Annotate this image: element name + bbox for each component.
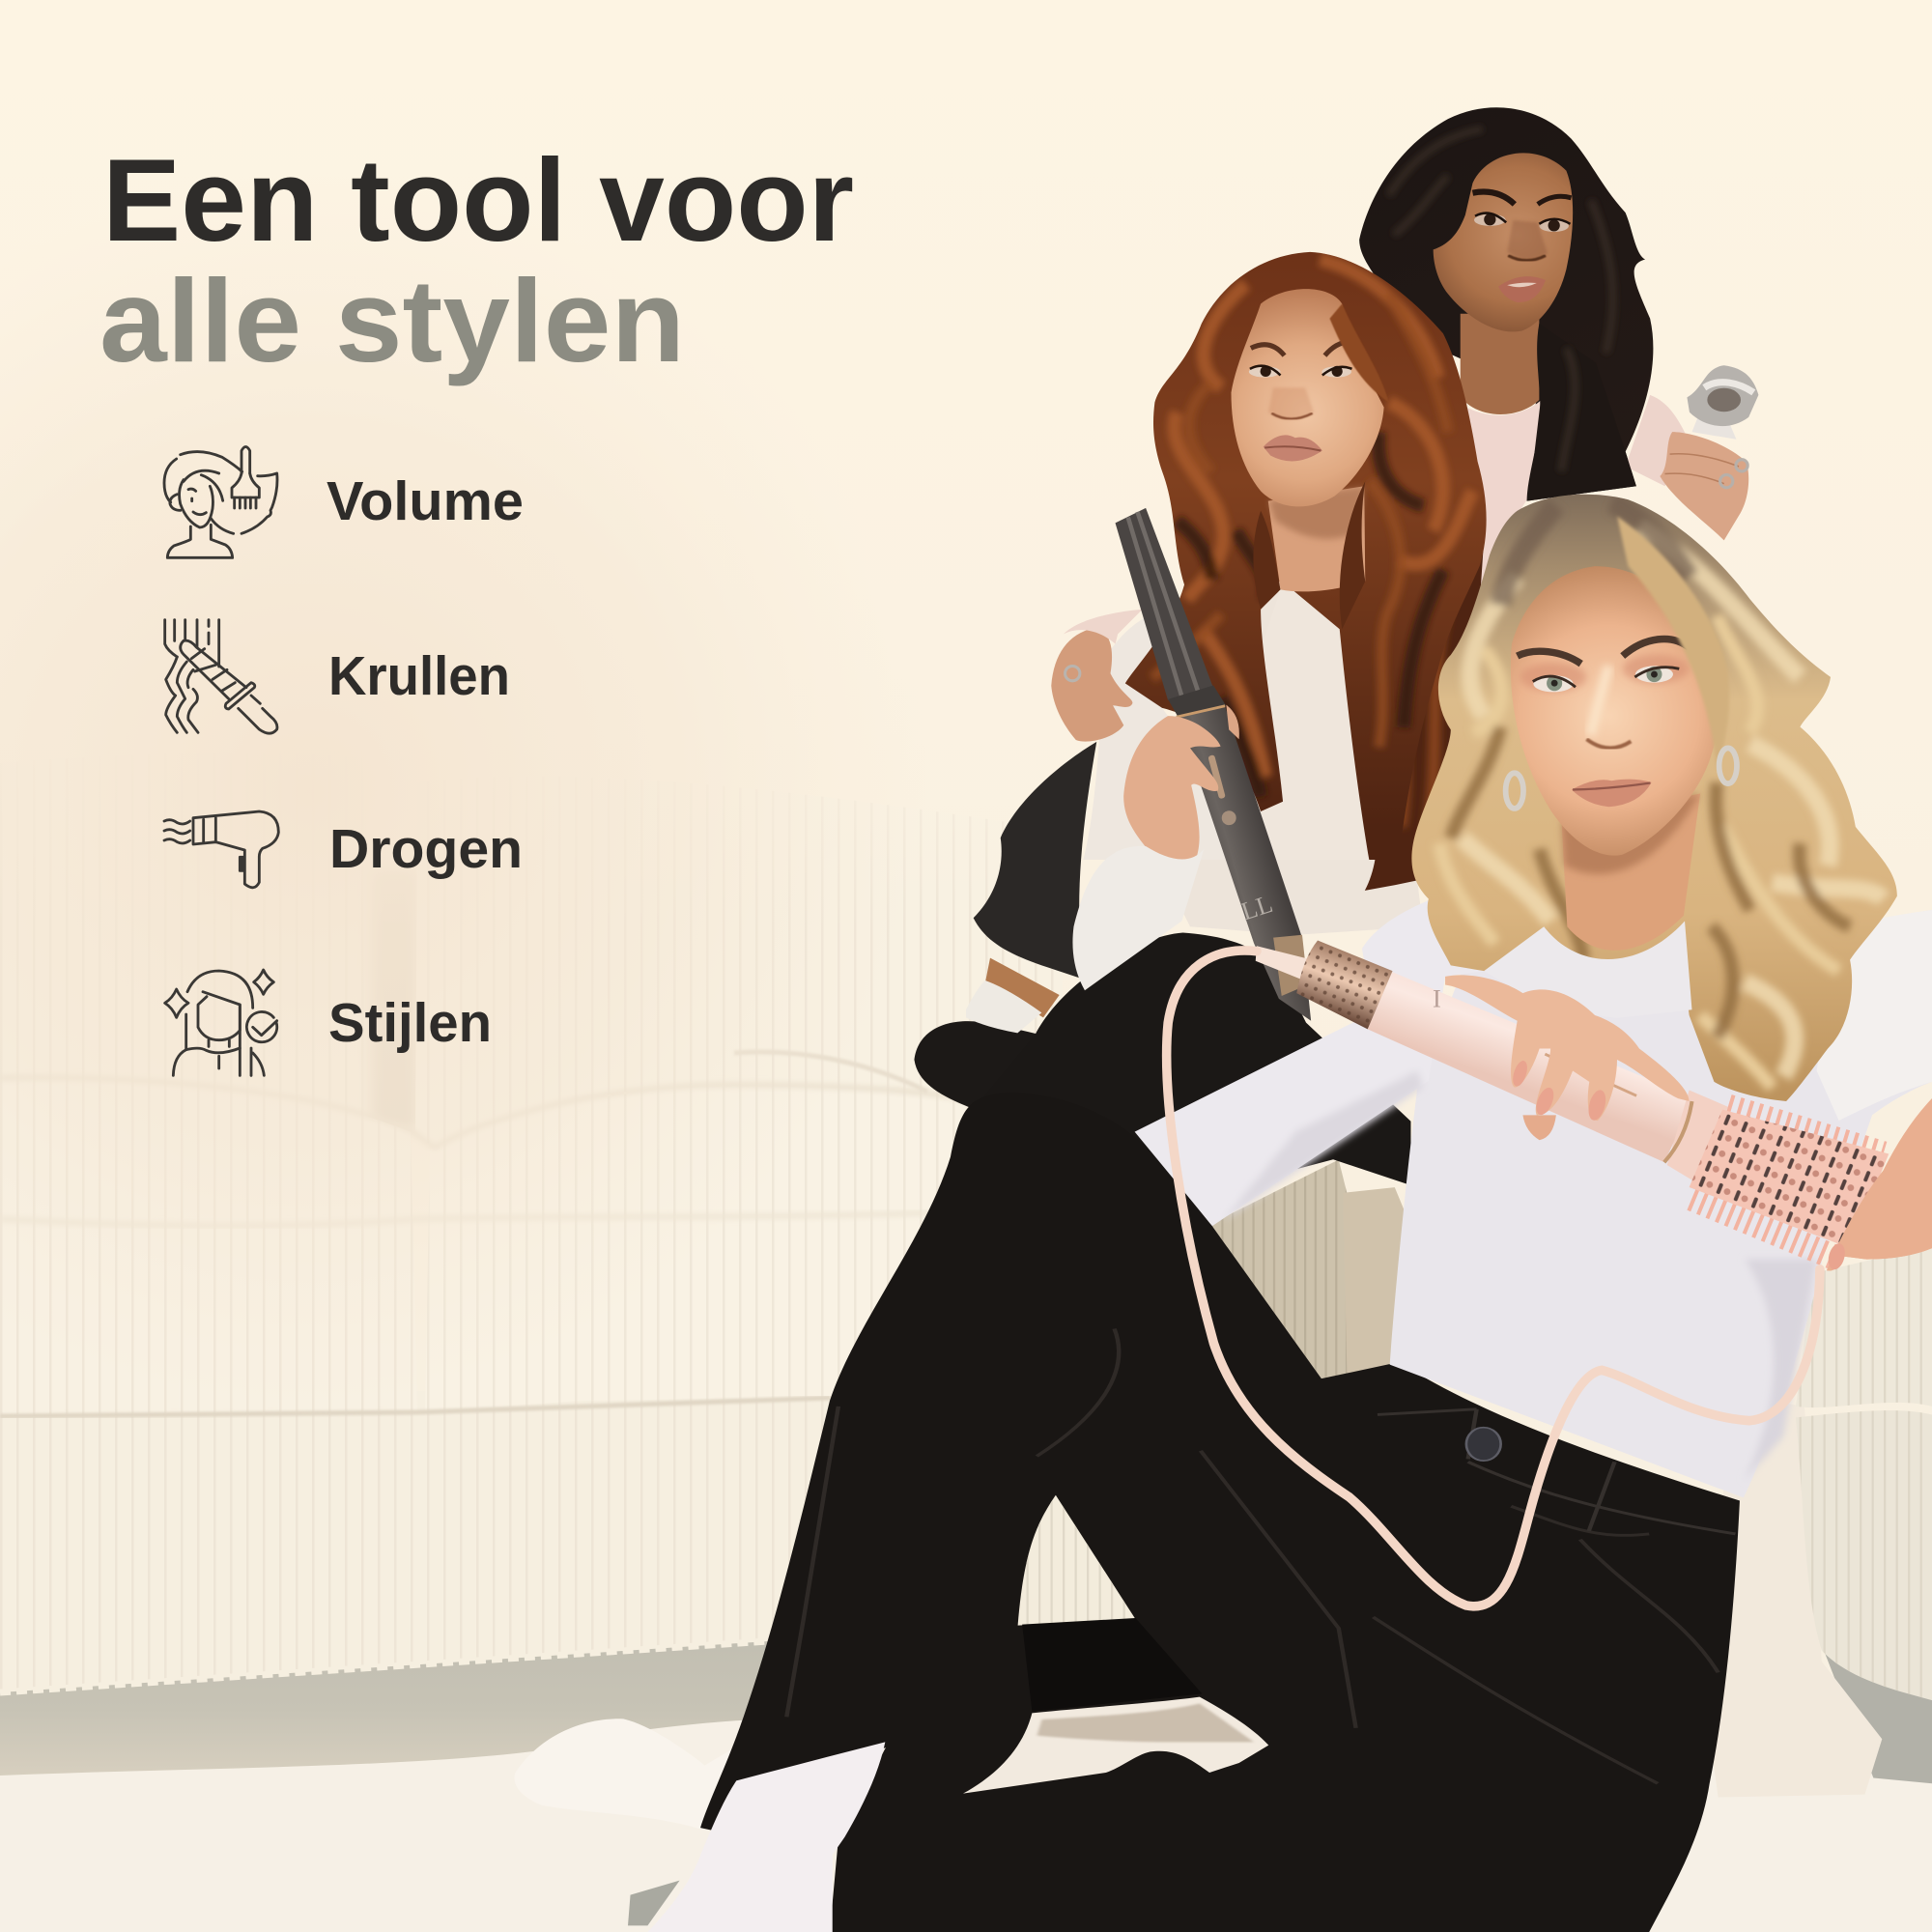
hair strands (1152, 260, 1472, 797)
hair: blonde (1411, 495, 1897, 1101)
feature: Stijlen (165, 970, 492, 1075)
white fluffy throw (1701, 1395, 1882, 1798)
torso shade (1744, 1260, 1817, 1481)
hand on dryer (1445, 975, 1690, 1121)
sofa seen between legs (1018, 1495, 1136, 1626)
sleeve shade (1223, 1070, 1423, 1220)
hair: copper (1125, 252, 1487, 860)
armchair lower (1796, 1410, 1932, 1700)
hand holding attachment (1660, 432, 1748, 540)
lower waves of copper hair (1350, 538, 1484, 891)
copper strand framing face (1330, 303, 1389, 403)
wand collar (1168, 686, 1226, 719)
hair: black (1359, 107, 1653, 501)
hair lower highlights (1389, 550, 1451, 860)
fur rug (0, 1719, 1932, 1932)
armchair upper (1796, 1245, 1932, 1407)
silver attachment (1687, 365, 1758, 440)
neck (1268, 486, 1365, 591)
gap behind armchair (1822, 1645, 1932, 1783)
thumb (1226, 705, 1239, 739)
fingers over brush (1827, 1098, 1932, 1270)
white power cord (1167, 951, 1820, 1606)
rug seen between legs (963, 1697, 1268, 1794)
grey jeans knee (974, 742, 1096, 980)
sofa shadow gap below (0, 1604, 1159, 1797)
title line 2: alle stylen (99, 255, 685, 386)
pink sleeve cuff (1064, 610, 1143, 644)
right hand holding brush (1827, 1098, 1932, 1270)
hand on shoulder (1051, 628, 1132, 742)
icon: hair dryer (164, 811, 278, 888)
label: Volume (327, 470, 524, 531)
white top body (1390, 910, 1932, 1497)
under thumb (1522, 1115, 1556, 1140)
face (1511, 566, 1720, 856)
back cushions (0, 753, 1063, 1150)
facial features (1472, 192, 1572, 302)
ring (1065, 666, 1080, 681)
facial features (1518, 639, 1690, 807)
white top body (1251, 582, 1381, 860)
earrings (1506, 748, 1737, 809)
title line 1: Een tool voor (102, 134, 854, 266)
floor shadow by sock (628, 1881, 680, 1925)
logo mark: I (1433, 983, 1441, 1012)
white top lower torso (1162, 580, 1423, 935)
neck (1461, 314, 1539, 414)
dryer barrel (1296, 941, 1728, 1190)
wand handle (1178, 705, 1311, 1021)
fur shadow (1037, 1703, 1254, 1742)
hair wisps over neck (1253, 481, 1365, 629)
trouser button (1466, 1428, 1501, 1461)
wand styler (1116, 508, 1311, 1021)
face (1434, 153, 1573, 331)
hair strands (1439, 502, 1884, 1088)
panel: red-haired woman (1051, 252, 1487, 935)
black trousers (974, 933, 1410, 1185)
peach tint (0, 164, 966, 1420)
hand holding wand (1123, 716, 1221, 860)
pink neck (1667, 1091, 1728, 1190)
dark floor gap between legs (1022, 1618, 1202, 1712)
feature: Volume (164, 446, 524, 557)
pink top (1458, 400, 1541, 600)
gold ring (1177, 706, 1225, 717)
finger lines and rings (1664, 454, 1747, 488)
label: Drogen (329, 818, 523, 879)
panel: lower leg details (628, 1618, 1268, 1932)
panel: blonde woman trousers (700, 1093, 1740, 1932)
panel: red-haired woman lower body (914, 742, 1410, 1185)
neck (1562, 793, 1700, 951)
sofa base (0, 1391, 1159, 1692)
fur cushion (1343, 1187, 1412, 1384)
pink sleeve (1626, 395, 1687, 486)
gold band (1664, 1101, 1691, 1162)
rose-gold air intake (1296, 941, 1393, 1029)
red-haired woman's sleeve (1072, 846, 1204, 990)
icon: curling iron with waves (165, 620, 277, 733)
seat cushions (0, 1078, 966, 1416)
wand barrel (1116, 508, 1213, 700)
label: Stijlen (328, 992, 492, 1053)
ruffled sock (966, 980, 1041, 1033)
front hair strand (1527, 324, 1636, 501)
facial features (1249, 342, 1355, 461)
round brush (1690, 1107, 1889, 1260)
face (1231, 289, 1384, 506)
icon: woman with hair brush (164, 446, 277, 557)
white sleeve (1135, 896, 1484, 1226)
beige cushion (1201, 1159, 1356, 1384)
label: Krullen (328, 645, 510, 706)
panel: black-haired woman (1359, 107, 1758, 600)
cord plug (1256, 946, 1312, 980)
monogram: LL (1237, 889, 1276, 925)
wand barrel ribs (1128, 512, 1199, 696)
white sock (647, 1742, 885, 1932)
nails (1510, 1059, 1848, 1271)
icon: styled hair with sparkle and check (165, 970, 277, 1075)
rose-gold grille (1273, 935, 1308, 996)
feature: Krullen (165, 620, 510, 733)
black trousers (700, 1093, 1740, 1932)
white top shoulder (1083, 605, 1270, 860)
panel: blonde woman upper body (1072, 495, 1932, 1497)
title (99, 134, 854, 386)
bare ankle (985, 958, 1060, 1017)
collar (1484, 921, 1691, 1018)
right sleeve highlight (1817, 910, 1932, 1121)
waistband (1378, 1409, 1735, 1534)
black foot (914, 1021, 1041, 1109)
fade overlay over sofa top (0, 676, 1256, 927)
feature: Drogen (164, 811, 523, 888)
front hair strand right of face (1617, 516, 1729, 771)
left foot in white sock (514, 1719, 746, 1830)
fabric folds (786, 1329, 1719, 1783)
controls (1222, 810, 1236, 825)
panel: right armchair, beige cushion and fur (1201, 1159, 1932, 1798)
hair highlights (1389, 128, 1613, 471)
slider (1545, 1054, 1636, 1095)
